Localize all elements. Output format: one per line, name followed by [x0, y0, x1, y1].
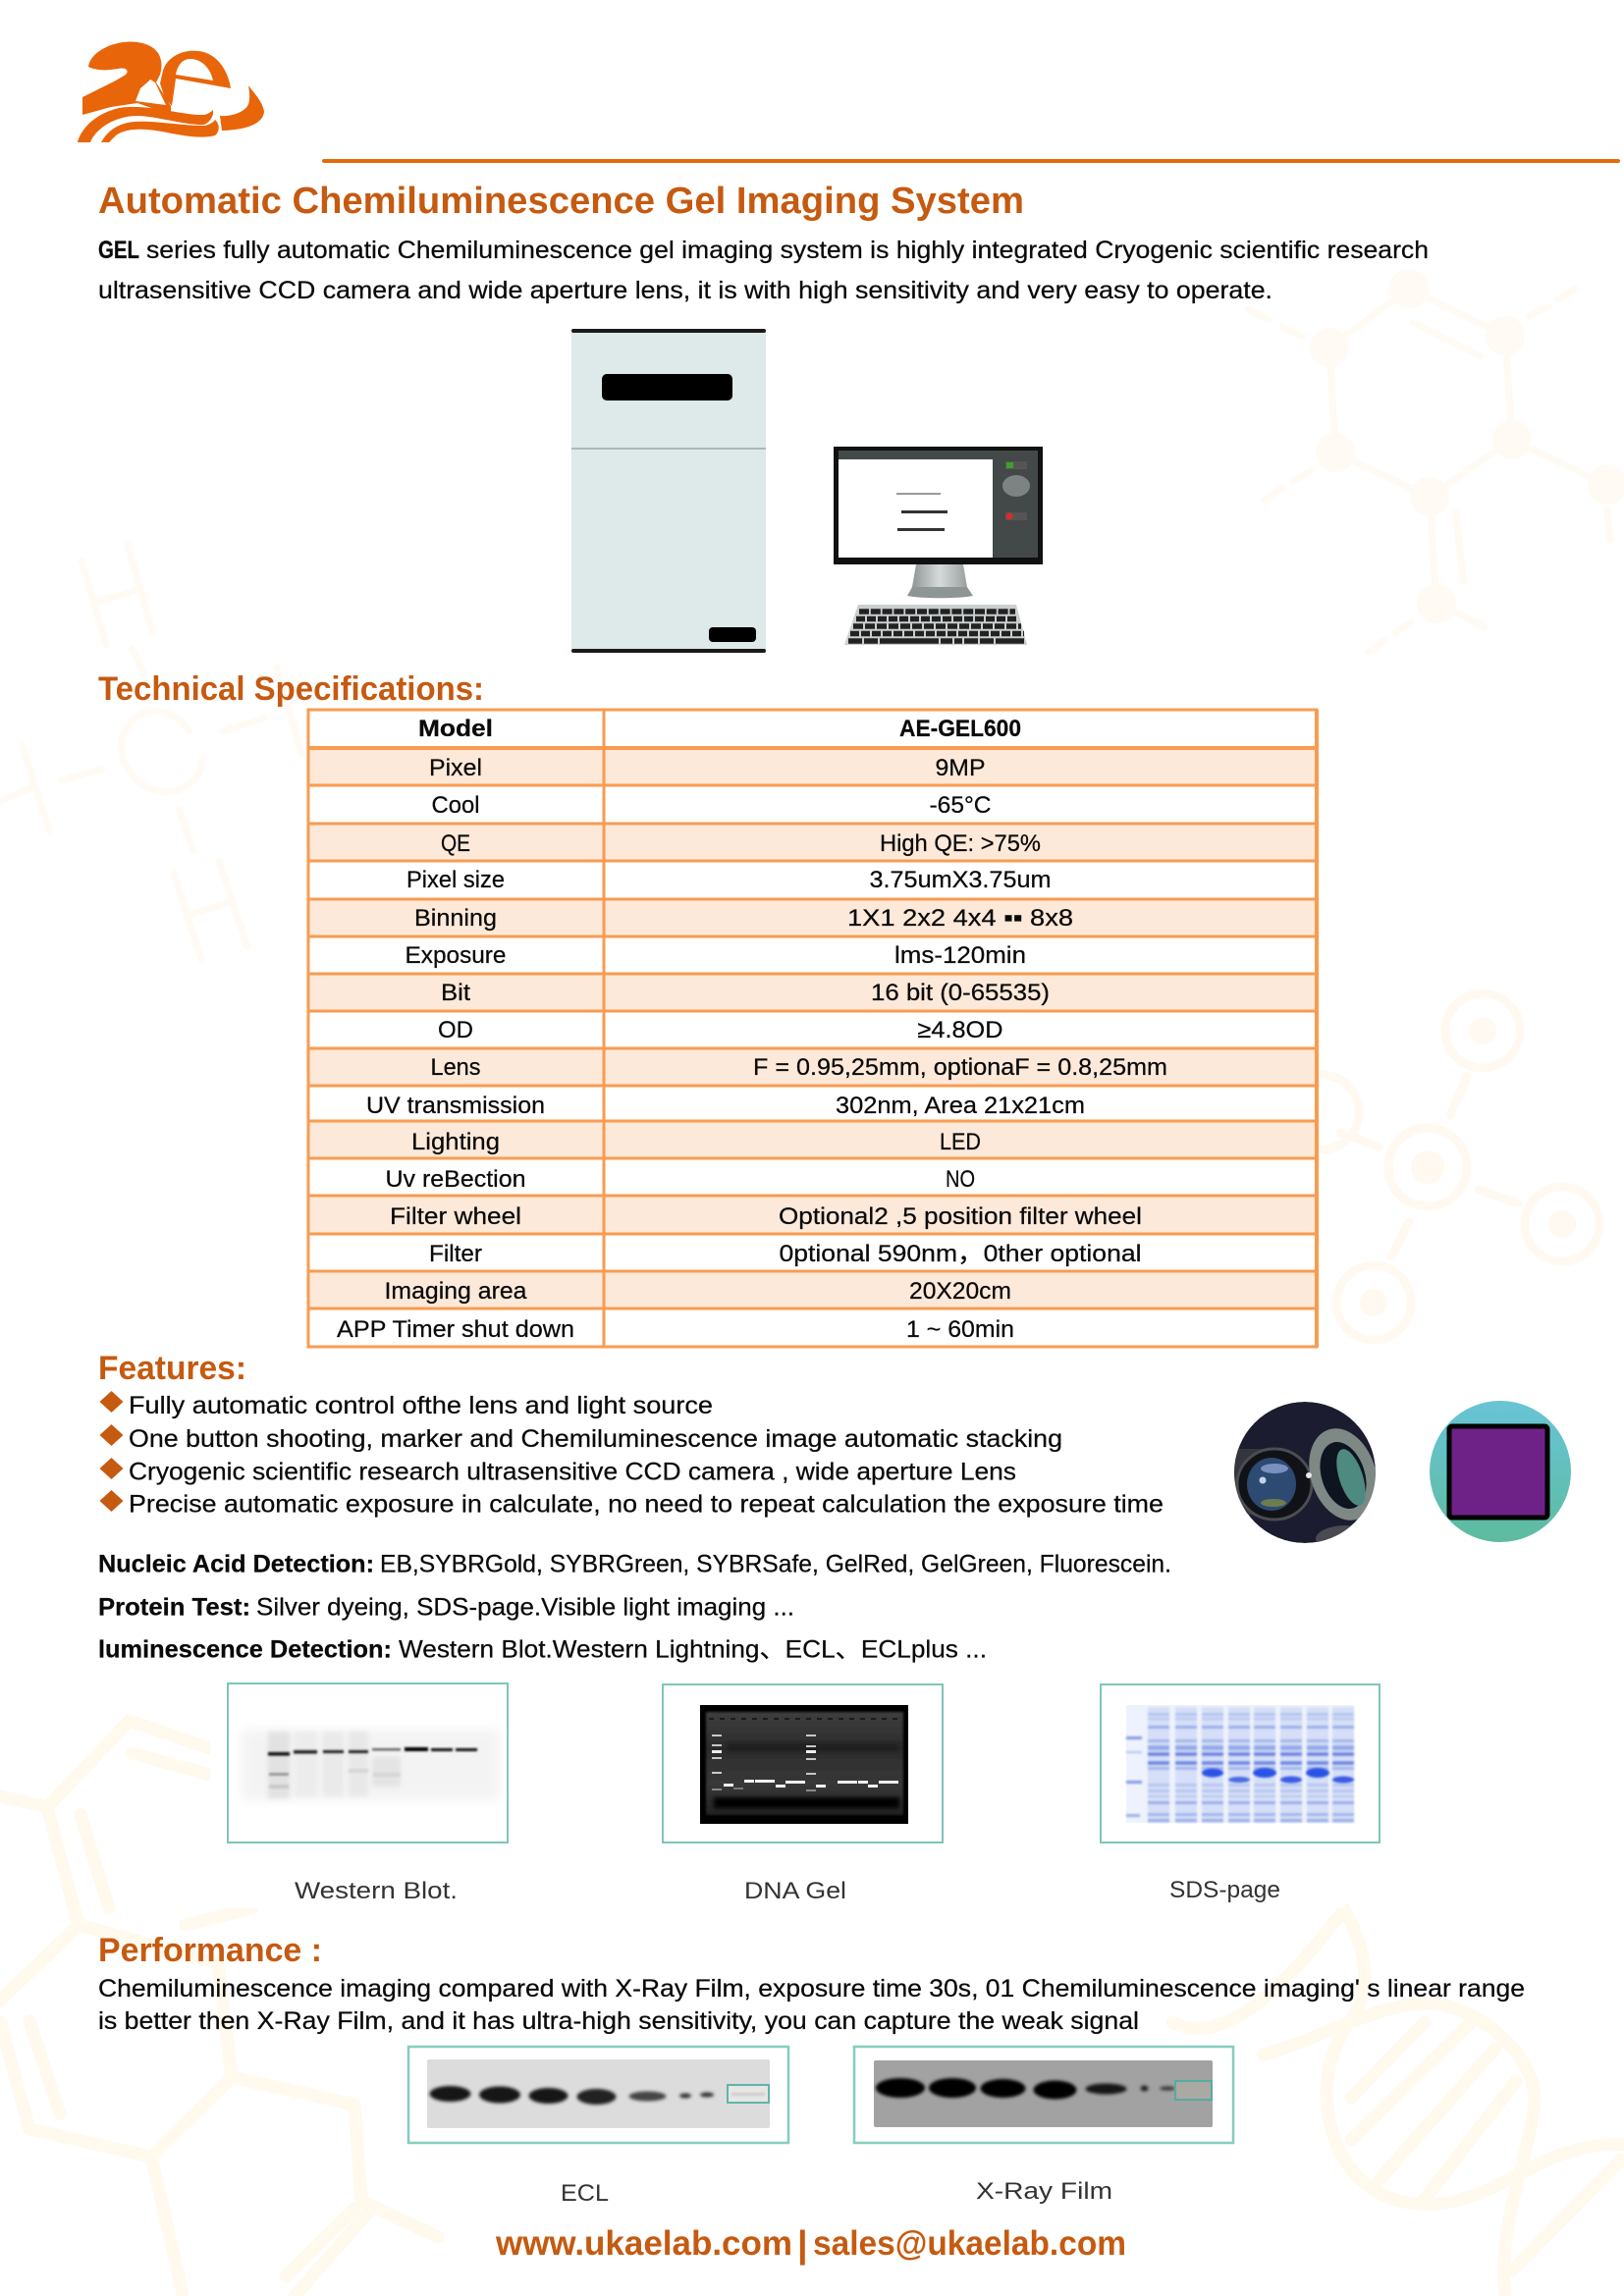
row: OD	[438, 1017, 1003, 1043]
row: cool: -65°C	[929, 792, 992, 819]
row: QE: QE	[441, 830, 470, 857]
row: binning: Binning	[414, 905, 497, 932]
detection: luminescence: luminescence Detection:	[98, 1635, 392, 1663]
row: bit: 16 bit (0-65535)	[871, 980, 1050, 1006]
detection: nucleic acid: Nucleic Acid Detection:	[98, 1551, 374, 1578]
intro paragraph	[98, 237, 1429, 304]
row: UV transmission: 302nm, Area 21x21cm	[836, 1093, 1085, 1119]
row: lens	[430, 1054, 1167, 1081]
icon: camera lens photo	[1234, 1402, 1376, 1543]
specifications table	[308, 710, 1317, 1347]
row: pixel size: Pixel size	[406, 867, 505, 893]
panel: X-ray film blot	[854, 2047, 1233, 2143]
watermark: DNA helix bottom right	[1172, 1909, 1624, 2294]
row: model: Model	[418, 716, 493, 742]
features list	[100, 1391, 1164, 1518]
row: filter: 0ptional 590nm，0ther optional	[780, 1241, 1141, 1267]
intro paragraph: GEL	[98, 237, 139, 264]
intro paragraph: ultrasensitive CCD camera and wide aperture lens, it is with high sensitivity and very easy to operate.	[98, 277, 1272, 304]
panel: SDS-page image	[1101, 1684, 1380, 1842]
footer contact	[495, 2224, 1126, 2266]
row: imaging area: 20X20cm	[909, 1278, 1011, 1305]
row: UV reflection	[385, 1166, 975, 1193]
heading: features: Features:	[98, 1350, 246, 1387]
detection: protein test: Silver dyeing, SDS-page.Visible light imaging ...	[256, 1594, 794, 1622]
row: OD: OD	[438, 1017, 473, 1043]
row: UV reflection: NO	[946, 1166, 975, 1193]
white backing behind sample images	[210, 1669, 1345, 1908]
row: bit	[441, 980, 1050, 1006]
detection: protein test: Protein Test:	[98, 1594, 250, 1622]
row: app timer: APP Timer shut down	[337, 1316, 574, 1343]
product: imaging cabinet	[571, 329, 766, 653]
row: binning: 1X1 2x2 4x4 ▪▪ 8x8	[847, 905, 1073, 932]
row: pixel size: 3.75umX3.75um	[870, 867, 1051, 893]
row: OD: ≥4.8OD	[917, 1017, 1003, 1043]
watermark: molecule top right	[1248, 269, 1624, 652]
row: filter wheel: Optional2 ,5 position filter wheel	[779, 1203, 1142, 1230]
row: lighting: LED	[940, 1129, 981, 1155]
detection: nucleic acid: EB,SYBRGold, SYBRGreen, SYBRSafe, GelRed, GelGreen, Fluorescein.	[380, 1551, 1171, 1578]
title: Automatic Chemiluminescence Gel Imaging System	[98, 181, 1024, 222]
feature 3: Cryogenic scientific research ultrasensitive CCD camera , wide aperture Lens	[129, 1459, 1016, 1486]
detection: luminescence	[98, 1635, 987, 1663]
performance paragraph: is better then X-Ray Film, and it has ultra-high sensitivity, you can capture the weak signal	[98, 2007, 1139, 2035]
row: exposure: lms-120min	[894, 942, 1026, 969]
row: imaging area	[385, 1278, 1011, 1305]
row: lighting: Lighting	[411, 1129, 500, 1155]
row: lens: F = 0.95,25mm, optionaF = 0.8,25mm	[753, 1054, 1167, 1081]
detection: luminescence: Western Blot.Western Lightning、ECL、ECLplus ...	[399, 1635, 987, 1663]
caption: SDS-page: SDS-page	[1169, 1877, 1280, 1903]
watermark: ring molecule right	[1284, 993, 1599, 1340]
row: pixel: 9MP	[935, 755, 986, 781]
caption: DNA gel: DNA Gel	[744, 1878, 846, 1904]
row: pixel	[429, 755, 986, 781]
footer contact: |	[797, 2224, 808, 2266]
row: imaging area: Imaging area	[385, 1278, 527, 1305]
row: binning	[414, 905, 1073, 932]
row: app timer	[337, 1316, 1014, 1343]
row: exposure	[405, 942, 1026, 969]
feature 2: One button shooting, marker and Chemiluminescence image automatic stacking	[129, 1425, 1062, 1453]
row: app timer: 1 ~ 60min	[906, 1316, 1014, 1343]
caption: western blot: Western Blot.	[295, 1878, 458, 1904]
row: model	[418, 716, 1021, 742]
row: bit: Bit	[441, 980, 470, 1006]
row: pixel: Pixel	[429, 755, 482, 781]
row: lens: Lens	[430, 1054, 481, 1081]
row: filter	[429, 1241, 1141, 1267]
product: computer monitor and keyboard	[834, 447, 1043, 645]
intro paragraph: series fully automatic Chemiluminescence gel imaging system is highly integrated Cryogenic scientific research	[146, 237, 1429, 264]
watermark: hexagons bottom left	[0, 1721, 438, 2296]
row: QE: High QE: >75%	[880, 830, 1041, 857]
row: UV transmission: UV transmission	[366, 1093, 545, 1119]
row: lighting	[411, 1129, 981, 1155]
heading: technical specifications: Technical Specifications:	[98, 670, 484, 708]
row: filter: Filter	[429, 1241, 482, 1267]
heading: performance: Performance :	[98, 1932, 322, 1969]
logo	[78, 42, 264, 142]
caption: ECL: ECL	[561, 2180, 609, 2207]
footer contact: www.ukaelab.com	[495, 2224, 792, 2263]
gel sample bands	[724, 1780, 898, 1789]
SDS overexpressed bands	[1202, 1768, 1354, 1783]
row: cool	[432, 792, 992, 819]
row: model: AE-GEL600	[899, 716, 1021, 742]
performance paragraph	[98, 1975, 1525, 2035]
feature 1: Fully automatic control ofthe lens and light source	[129, 1392, 713, 1419]
row: filter wheel	[390, 1203, 1142, 1230]
icon: CCD sensor	[1430, 1401, 1571, 1542]
row: pixel size	[406, 867, 1051, 893]
row: cool: Cool	[432, 792, 479, 819]
header rule	[322, 159, 1620, 163]
row: filter wheel: Filter wheel	[390, 1203, 521, 1230]
watermark: H-C-H letters left	[0, 545, 301, 960]
table row fills	[308, 710, 1316, 1347]
caption: X-ray film: X-Ray Film	[976, 2178, 1112, 2205]
performance paragraph: Chemiluminescence imaging compared with X-Ray Film, exposure time 30s, 01 Chemiluminescence imaging' s linear range	[98, 1975, 1525, 2002]
row: exposure: Exposure	[405, 942, 507, 969]
panel: western blot image	[228, 1683, 508, 1842]
row: UV transmission	[366, 1093, 1085, 1119]
footer contact: sales@ukaelab.com	[813, 2224, 1126, 2263]
row: UV reflection: Uv reBection	[385, 1166, 526, 1193]
row: QE	[441, 830, 1041, 857]
table grid lines	[308, 710, 1317, 1347]
gel ladder bands	[712, 1735, 816, 1791]
SDS marker lane	[1126, 1736, 1142, 1817]
panel: DNA gel image	[663, 1684, 943, 1842]
panel: ECL blot	[408, 2047, 788, 2143]
feature 4: Precise automatic exposure in calculate, no need to repeat calculation the exposure time	[129, 1490, 1164, 1518]
